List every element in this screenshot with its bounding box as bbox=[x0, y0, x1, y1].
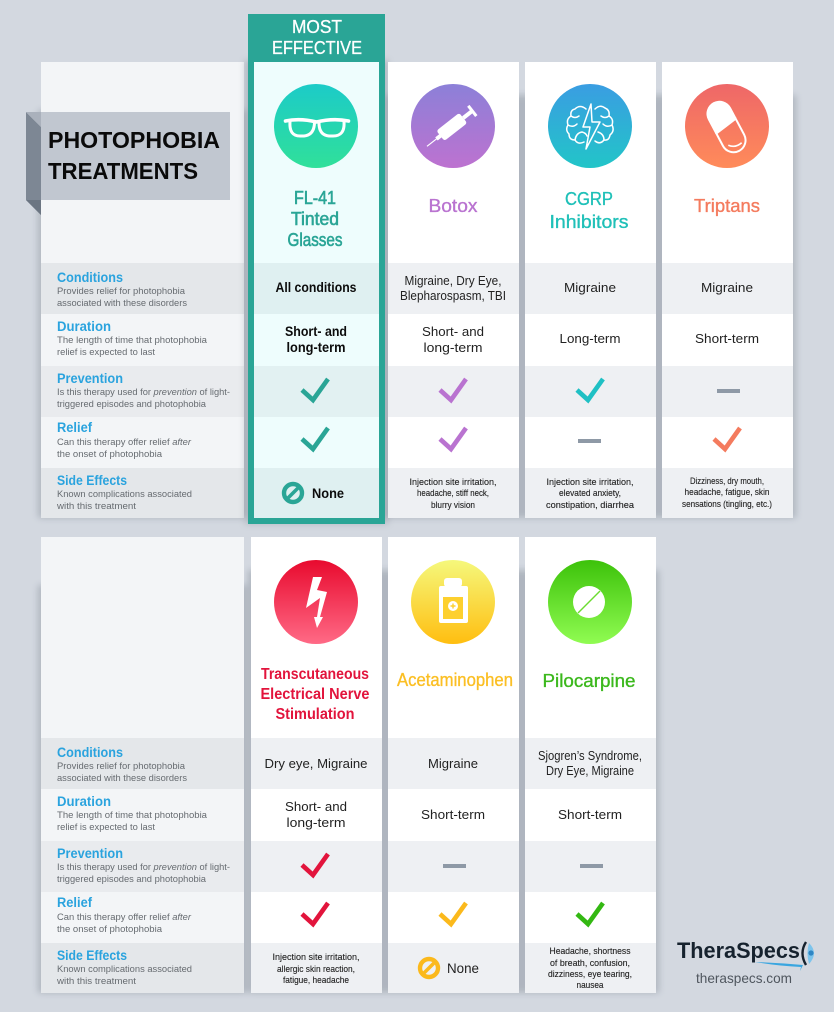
heading: Inhibitors bbox=[550, 212, 628, 232]
label: side effects: Side Effects bbox=[57, 948, 127, 963]
duration value: Short- and bbox=[422, 324, 484, 339]
label: relief: Can this therapy offer relief after bbox=[57, 437, 192, 448]
label: conditions: Provides relief for photophobia bbox=[57, 761, 186, 772]
heading: CGRP bbox=[565, 189, 613, 209]
label: prevention: triggered episodes and photophobia bbox=[57, 874, 207, 885]
heading: Transcutaneous bbox=[261, 666, 369, 683]
check: prevention bbox=[577, 379, 603, 400]
side effects: of breath, confusion, bbox=[550, 958, 630, 968]
label: conditions: associated with these disorders bbox=[57, 773, 187, 784]
heading: Tinted bbox=[291, 209, 339, 229]
panel: bottom row labels bbox=[41, 537, 244, 993]
heading bbox=[288, 188, 342, 250]
heading: Acetaminophen bbox=[397, 670, 513, 690]
label: relief: Relief bbox=[57, 420, 92, 435]
panel: acetaminophen bbox=[388, 537, 519, 993]
side effects: sensations (tingling, etc.) bbox=[682, 499, 772, 509]
label: side effects: Side Effects bbox=[57, 473, 127, 488]
side effects: Headache, shortness bbox=[550, 946, 631, 956]
heading: Glasses bbox=[288, 230, 342, 250]
title bbox=[48, 127, 220, 184]
label: duration: The length of time that photophobia bbox=[57, 810, 208, 821]
heading bbox=[550, 189, 628, 232]
panel: FL-41 tinted glasses (most effective) bbox=[245, 14, 388, 524]
duration value bbox=[285, 323, 347, 355]
logo: TheraSpecs: TheraSpecs bbox=[677, 938, 800, 963]
panel: Botox bbox=[388, 62, 519, 518]
conditions value: Sjogren’s Syndrome, bbox=[538, 748, 642, 763]
label: side effects: Known complications associated bbox=[57, 964, 192, 975]
heading: Electrical Nerve bbox=[260, 686, 370, 703]
title: PHOTOPHOBIA bbox=[48, 127, 220, 153]
label: duration: Duration bbox=[57, 319, 111, 334]
check: prevention bbox=[440, 379, 466, 400]
panel: transcutaneous electrical nerve stimulation bbox=[251, 537, 382, 993]
label: relief bbox=[57, 420, 192, 460]
side effects: headache, fatigue, skin bbox=[684, 487, 770, 497]
label: prevention: Prevention bbox=[57, 371, 123, 386]
conditions value: Migraine, Dry Eye, bbox=[404, 273, 502, 288]
label: relief: Can this therapy offer relief after bbox=[57, 912, 192, 923]
label: side effects bbox=[56, 473, 192, 512]
side effects: none: None bbox=[312, 485, 344, 501]
side effects: Injection site irritation, bbox=[272, 952, 360, 962]
label: prevention bbox=[57, 846, 230, 885]
most effective badge: MOST bbox=[292, 17, 342, 37]
heading: FL-41 bbox=[294, 188, 336, 208]
duration value: Short-term bbox=[421, 807, 485, 822]
side effects: nausea bbox=[576, 980, 604, 990]
icon: syringe bbox=[411, 84, 495, 168]
label: duration: relief is expected to last bbox=[57, 347, 155, 358]
label: conditions: Provides relief for photophobia bbox=[57, 286, 186, 297]
conditions value: Migraine bbox=[564, 280, 616, 295]
check: relief bbox=[302, 428, 328, 449]
side effects: none bbox=[420, 959, 479, 977]
duration value: long-term bbox=[286, 339, 346, 355]
side effects: headache, stiff neck, bbox=[417, 488, 489, 498]
label: side effects bbox=[56, 948, 192, 987]
icon: lightning bolt bbox=[274, 560, 358, 644]
conditions value bbox=[538, 748, 642, 778]
heading: Triptans bbox=[694, 196, 760, 216]
conditions value: Migraine bbox=[701, 280, 753, 295]
title: TREATMENTS bbox=[48, 158, 198, 184]
most effective badge bbox=[272, 17, 362, 58]
duration value: long-term bbox=[286, 815, 346, 830]
panel: pilocarpine bbox=[525, 537, 656, 993]
side effects bbox=[548, 946, 632, 990]
conditions value bbox=[400, 273, 506, 303]
duration value: Short-term bbox=[558, 807, 622, 822]
check: prevention bbox=[302, 379, 328, 400]
label: prevention: Prevention bbox=[57, 846, 123, 861]
heading: Stimulation bbox=[276, 706, 354, 723]
side effects: Dizziness, dry mouth, bbox=[690, 476, 764, 486]
side effects: none: None bbox=[447, 960, 479, 976]
label: prevention: Is this therapy used for prevention of light- bbox=[57, 387, 230, 398]
heading: Pilocarpine bbox=[542, 671, 636, 691]
conditions value: Migraine bbox=[428, 756, 478, 771]
label: side effects: Known complications associated bbox=[57, 489, 192, 500]
check: prevention bbox=[302, 854, 328, 875]
label: prevention bbox=[57, 371, 230, 410]
label: duration bbox=[57, 319, 208, 358]
heading bbox=[260, 666, 370, 723]
title banner bbox=[26, 112, 230, 215]
check: relief bbox=[440, 428, 466, 449]
icon: capsule bbox=[685, 84, 769, 168]
side effects: allergic skin reaction, bbox=[277, 964, 355, 974]
check: relief bbox=[440, 903, 466, 924]
side effects: none bbox=[284, 484, 344, 502]
side effects bbox=[272, 952, 360, 985]
panel: top row labels bbox=[41, 62, 244, 518]
label: relief: the onset of photophobia bbox=[57, 924, 163, 935]
most effective badge: EFFECTIVE bbox=[272, 38, 362, 58]
label: prevention: Is this therapy used for prevention of light- bbox=[57, 862, 230, 873]
side effects: dizziness, eye tearing, bbox=[548, 969, 632, 979]
check: relief bbox=[302, 903, 328, 924]
panel: triptans bbox=[662, 62, 793, 518]
icon: bottle bbox=[411, 560, 495, 644]
duration value: long-term bbox=[424, 340, 482, 355]
duration value: Short- and bbox=[285, 323, 347, 339]
side effects bbox=[546, 477, 635, 510]
icon: glasses bbox=[274, 84, 358, 168]
dash: prevention bbox=[580, 864, 603, 868]
duration value bbox=[285, 799, 347, 830]
label: conditions: Conditions bbox=[57, 745, 123, 760]
logo: TheraSpecs bbox=[677, 938, 814, 986]
side effects: Injection site irritation, bbox=[410, 477, 496, 487]
label: conditions: associated with these disorders bbox=[57, 298, 187, 309]
logo: TheraSpecs: theraspecs.com bbox=[696, 970, 792, 986]
dash: prevention bbox=[443, 864, 466, 868]
check: relief bbox=[577, 903, 603, 924]
label: conditions bbox=[57, 745, 187, 784]
conditions value: Dry eye, Migraine bbox=[264, 756, 368, 771]
side effects bbox=[410, 477, 496, 510]
duration value: Short-term bbox=[695, 331, 759, 346]
label: duration: relief is expected to last bbox=[57, 822, 155, 833]
side effects bbox=[682, 476, 772, 509]
duration value: Long-term bbox=[560, 331, 620, 346]
dash: prevention bbox=[717, 389, 740, 393]
icon: tablet bbox=[548, 560, 632, 644]
label: side effects: with this treatment bbox=[56, 501, 136, 512]
side effects: blurry vision bbox=[431, 500, 475, 510]
side effects: constipation, diarrhea bbox=[546, 500, 635, 510]
dash: relief bbox=[578, 439, 601, 443]
label: duration: Duration bbox=[57, 794, 111, 809]
panel: CGRP inhibitors bbox=[525, 62, 656, 518]
label: conditions bbox=[57, 270, 187, 309]
conditions value: Dry Eye, Migraine bbox=[546, 763, 634, 778]
label: relief: the onset of photophobia bbox=[57, 449, 163, 460]
label: duration: The length of time that photophobia bbox=[57, 335, 208, 346]
label: side effects: with this treatment bbox=[56, 976, 136, 987]
side effects: elevated anxiety, bbox=[559, 488, 621, 498]
label: conditions: Conditions bbox=[57, 270, 123, 285]
conditions value: Blepharospasm, TBI bbox=[400, 288, 506, 303]
duration value: Short- and bbox=[285, 799, 347, 814]
icon: brain bbox=[548, 84, 632, 168]
label: relief: Relief bbox=[57, 895, 92, 910]
label: relief bbox=[57, 895, 192, 935]
conditions value: All conditions bbox=[276, 279, 357, 295]
heading: Botox bbox=[428, 196, 478, 216]
duration value bbox=[422, 324, 484, 355]
check: relief bbox=[714, 428, 740, 449]
label: prevention: triggered episodes and photophobia bbox=[57, 399, 207, 410]
side effects: Injection site irritation, bbox=[546, 477, 634, 487]
side effects: fatigue, headache bbox=[283, 975, 349, 985]
label: duration bbox=[57, 794, 208, 833]
